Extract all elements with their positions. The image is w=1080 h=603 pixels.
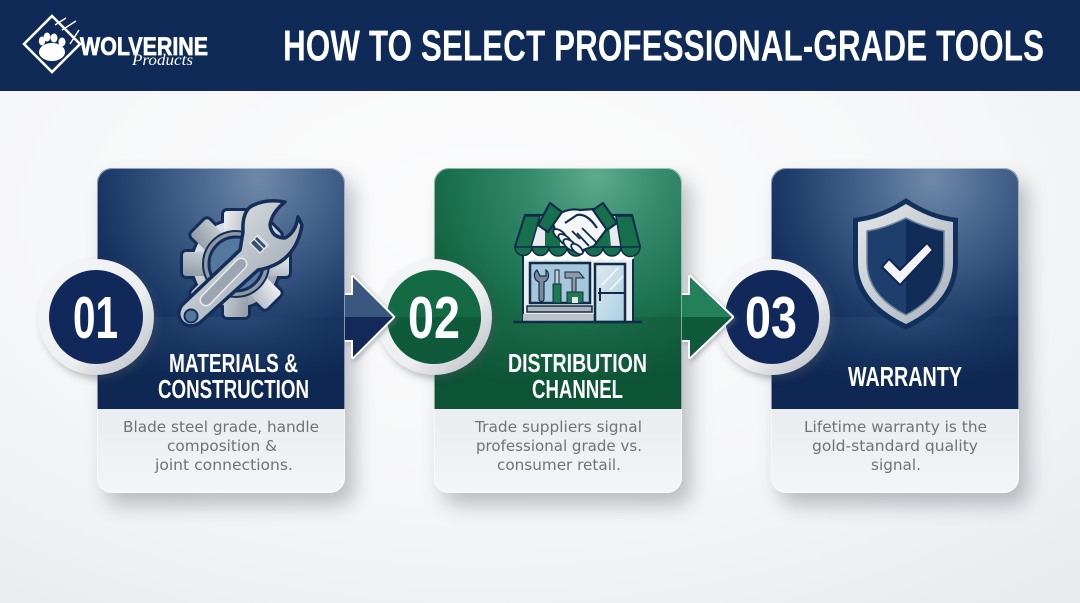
logo [24, 16, 208, 72]
card description [804, 418, 987, 474]
card description: Trade suppliers signal [474, 418, 642, 436]
card description: gold-standard quality [812, 437, 978, 455]
card description: joint connections. [154, 456, 293, 474]
badge: 03: 03 [745, 285, 797, 351]
card description: professional grade vs. [476, 437, 642, 455]
icon: shield with check [853, 198, 958, 330]
badge: 02: 02 [408, 285, 460, 351]
icon: storefront with handshake [513, 203, 642, 322]
awning [515, 215, 640, 260]
badge: 02 [376, 259, 496, 379]
card description: consumer retail. [497, 456, 621, 474]
card heading: DISTRIBUTION [508, 348, 647, 378]
badge: 01 [38, 259, 158, 379]
logo wordmark: WOLVERINE [80, 33, 208, 61]
card heading: CONSTRUCTION [158, 374, 309, 404]
card description: composition & [167, 437, 277, 455]
card description: Lifetime warranty is the [804, 418, 987, 436]
header bar [0, 0, 1080, 91]
card heading: MATERIALS & [169, 348, 298, 378]
card heading [158, 348, 309, 404]
handshake [538, 203, 617, 256]
card description [123, 418, 319, 474]
card description: Blade steel grade, handle [123, 418, 319, 436]
card description: signal. [871, 456, 921, 474]
arrow: step 2 to step 3 [682, 277, 734, 359]
card description [474, 418, 642, 474]
panel: materials and construction [97, 168, 354, 505]
card heading [508, 348, 647, 404]
arrow: step 1 to step 2 [345, 277, 395, 359]
badge: 03 [714, 259, 834, 379]
badge: 01: 01 [73, 285, 118, 351]
icon: paw in diamond [24, 16, 80, 72]
icon: gear and wrench [179, 201, 302, 326]
panel: distribution channel [434, 168, 691, 505]
card heading: WARRANTY [848, 361, 962, 392]
card heading: CHANNEL [532, 374, 623, 404]
panel: warranty [771, 168, 1028, 505]
logo subline: Products [131, 52, 193, 69]
